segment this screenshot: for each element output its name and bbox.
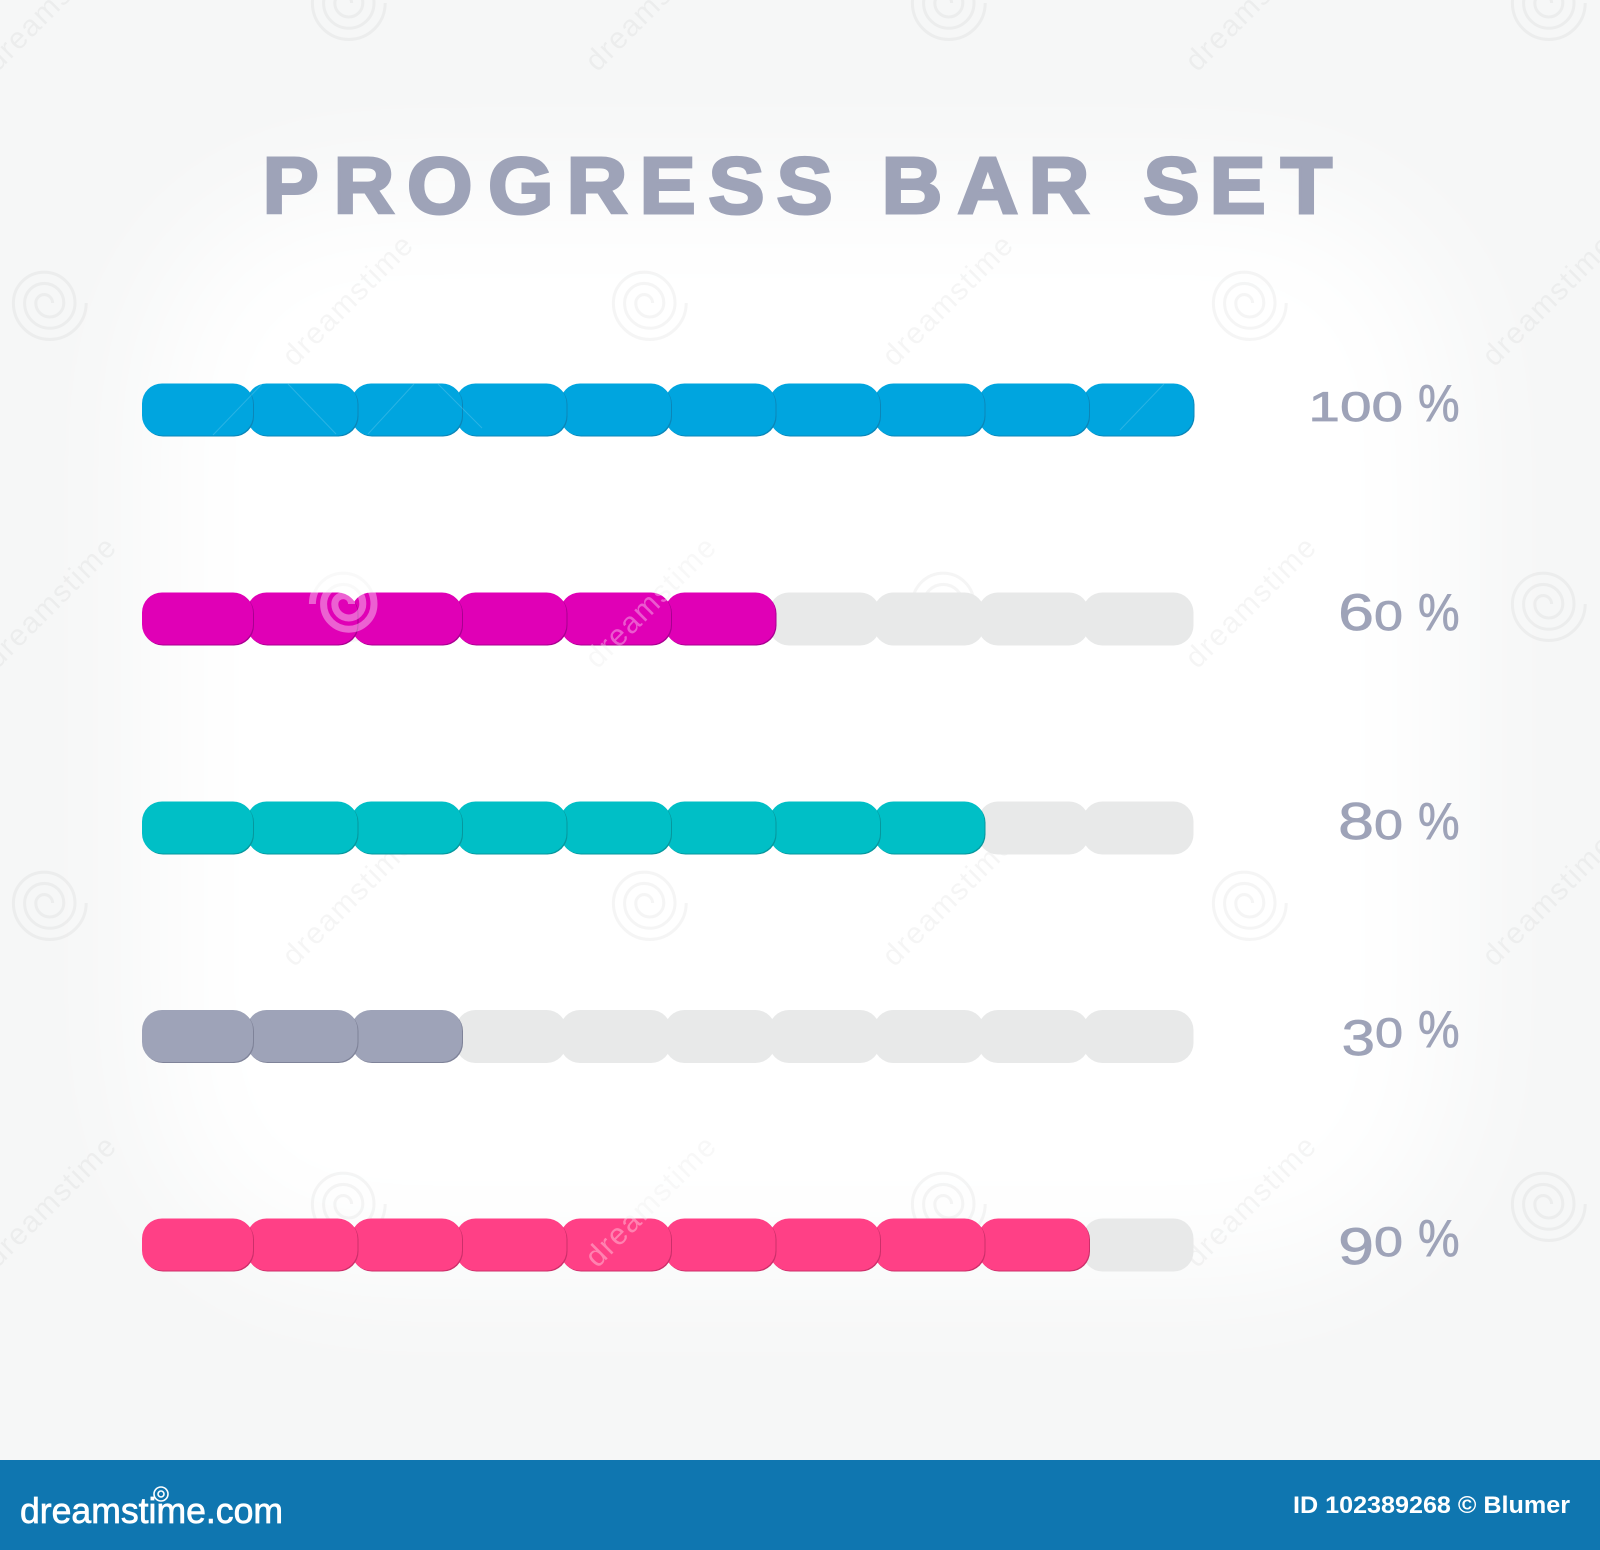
progress bar: 90 percent pink: dreamstime [579, 1129, 724, 1274]
text: dreamstime [579, 530, 724, 675]
label: 80 percent: % [1418, 793, 1460, 851]
label: 90 percent: 0 [1374, 1219, 1403, 1266]
footer logo text: dreamstime.com [20, 1490, 283, 1531]
progress bar: 90 percent pink [142, 1129, 1194, 1274]
label: 100 percent: % [1418, 375, 1460, 433]
text: dreamstime [876, 828, 1021, 973]
label: 90 percent: % [1418, 1210, 1460, 1268]
label: 100 percent [1308, 375, 1460, 433]
icon: logo spiral [154, 1487, 168, 1501]
label: 30 percent: 3 [1342, 1010, 1375, 1066]
progress bar: 60 percent magenta [142, 530, 1194, 675]
footer band [0, 1460, 1600, 1550]
label: 100 percent: 100 [1308, 383, 1403, 430]
progress bar: 100 percent blue [142, 384, 1194, 436]
text: dreamstime [876, 228, 1021, 373]
title: PROGRESS BAR SET [263, 142, 1332, 231]
label: 60 percent: 60 [1338, 584, 1403, 642]
progress bar: 30 percent grey [142, 1010, 1194, 1063]
text: dreamstime [276, 828, 421, 973]
label: 30 percent [1342, 1001, 1460, 1066]
progress bar: 60 percent magenta: dreamstime [579, 530, 724, 675]
label: 60 percent: % [1418, 584, 1460, 642]
label: 80 percent [1338, 793, 1460, 851]
label: 90 percent: 9 [1338, 1218, 1374, 1276]
text: dreamstime [579, 1129, 724, 1274]
progress bar: 80 percent teal [142, 802, 1194, 854]
text: dreamstime [276, 228, 421, 373]
label: 30 percent: 0 [1375, 1009, 1403, 1056]
label: 90 percent [1338, 1210, 1460, 1276]
image id and author: ID 102389268 © Blumer [1293, 1492, 1570, 1519]
label: 30 percent: % [1418, 1001, 1460, 1059]
label: 60 percent [1338, 584, 1460, 642]
text: dreamstime [1179, 530, 1324, 675]
label: 80 percent: 80 [1338, 793, 1403, 851]
text: dreamstime [1179, 1129, 1324, 1274]
